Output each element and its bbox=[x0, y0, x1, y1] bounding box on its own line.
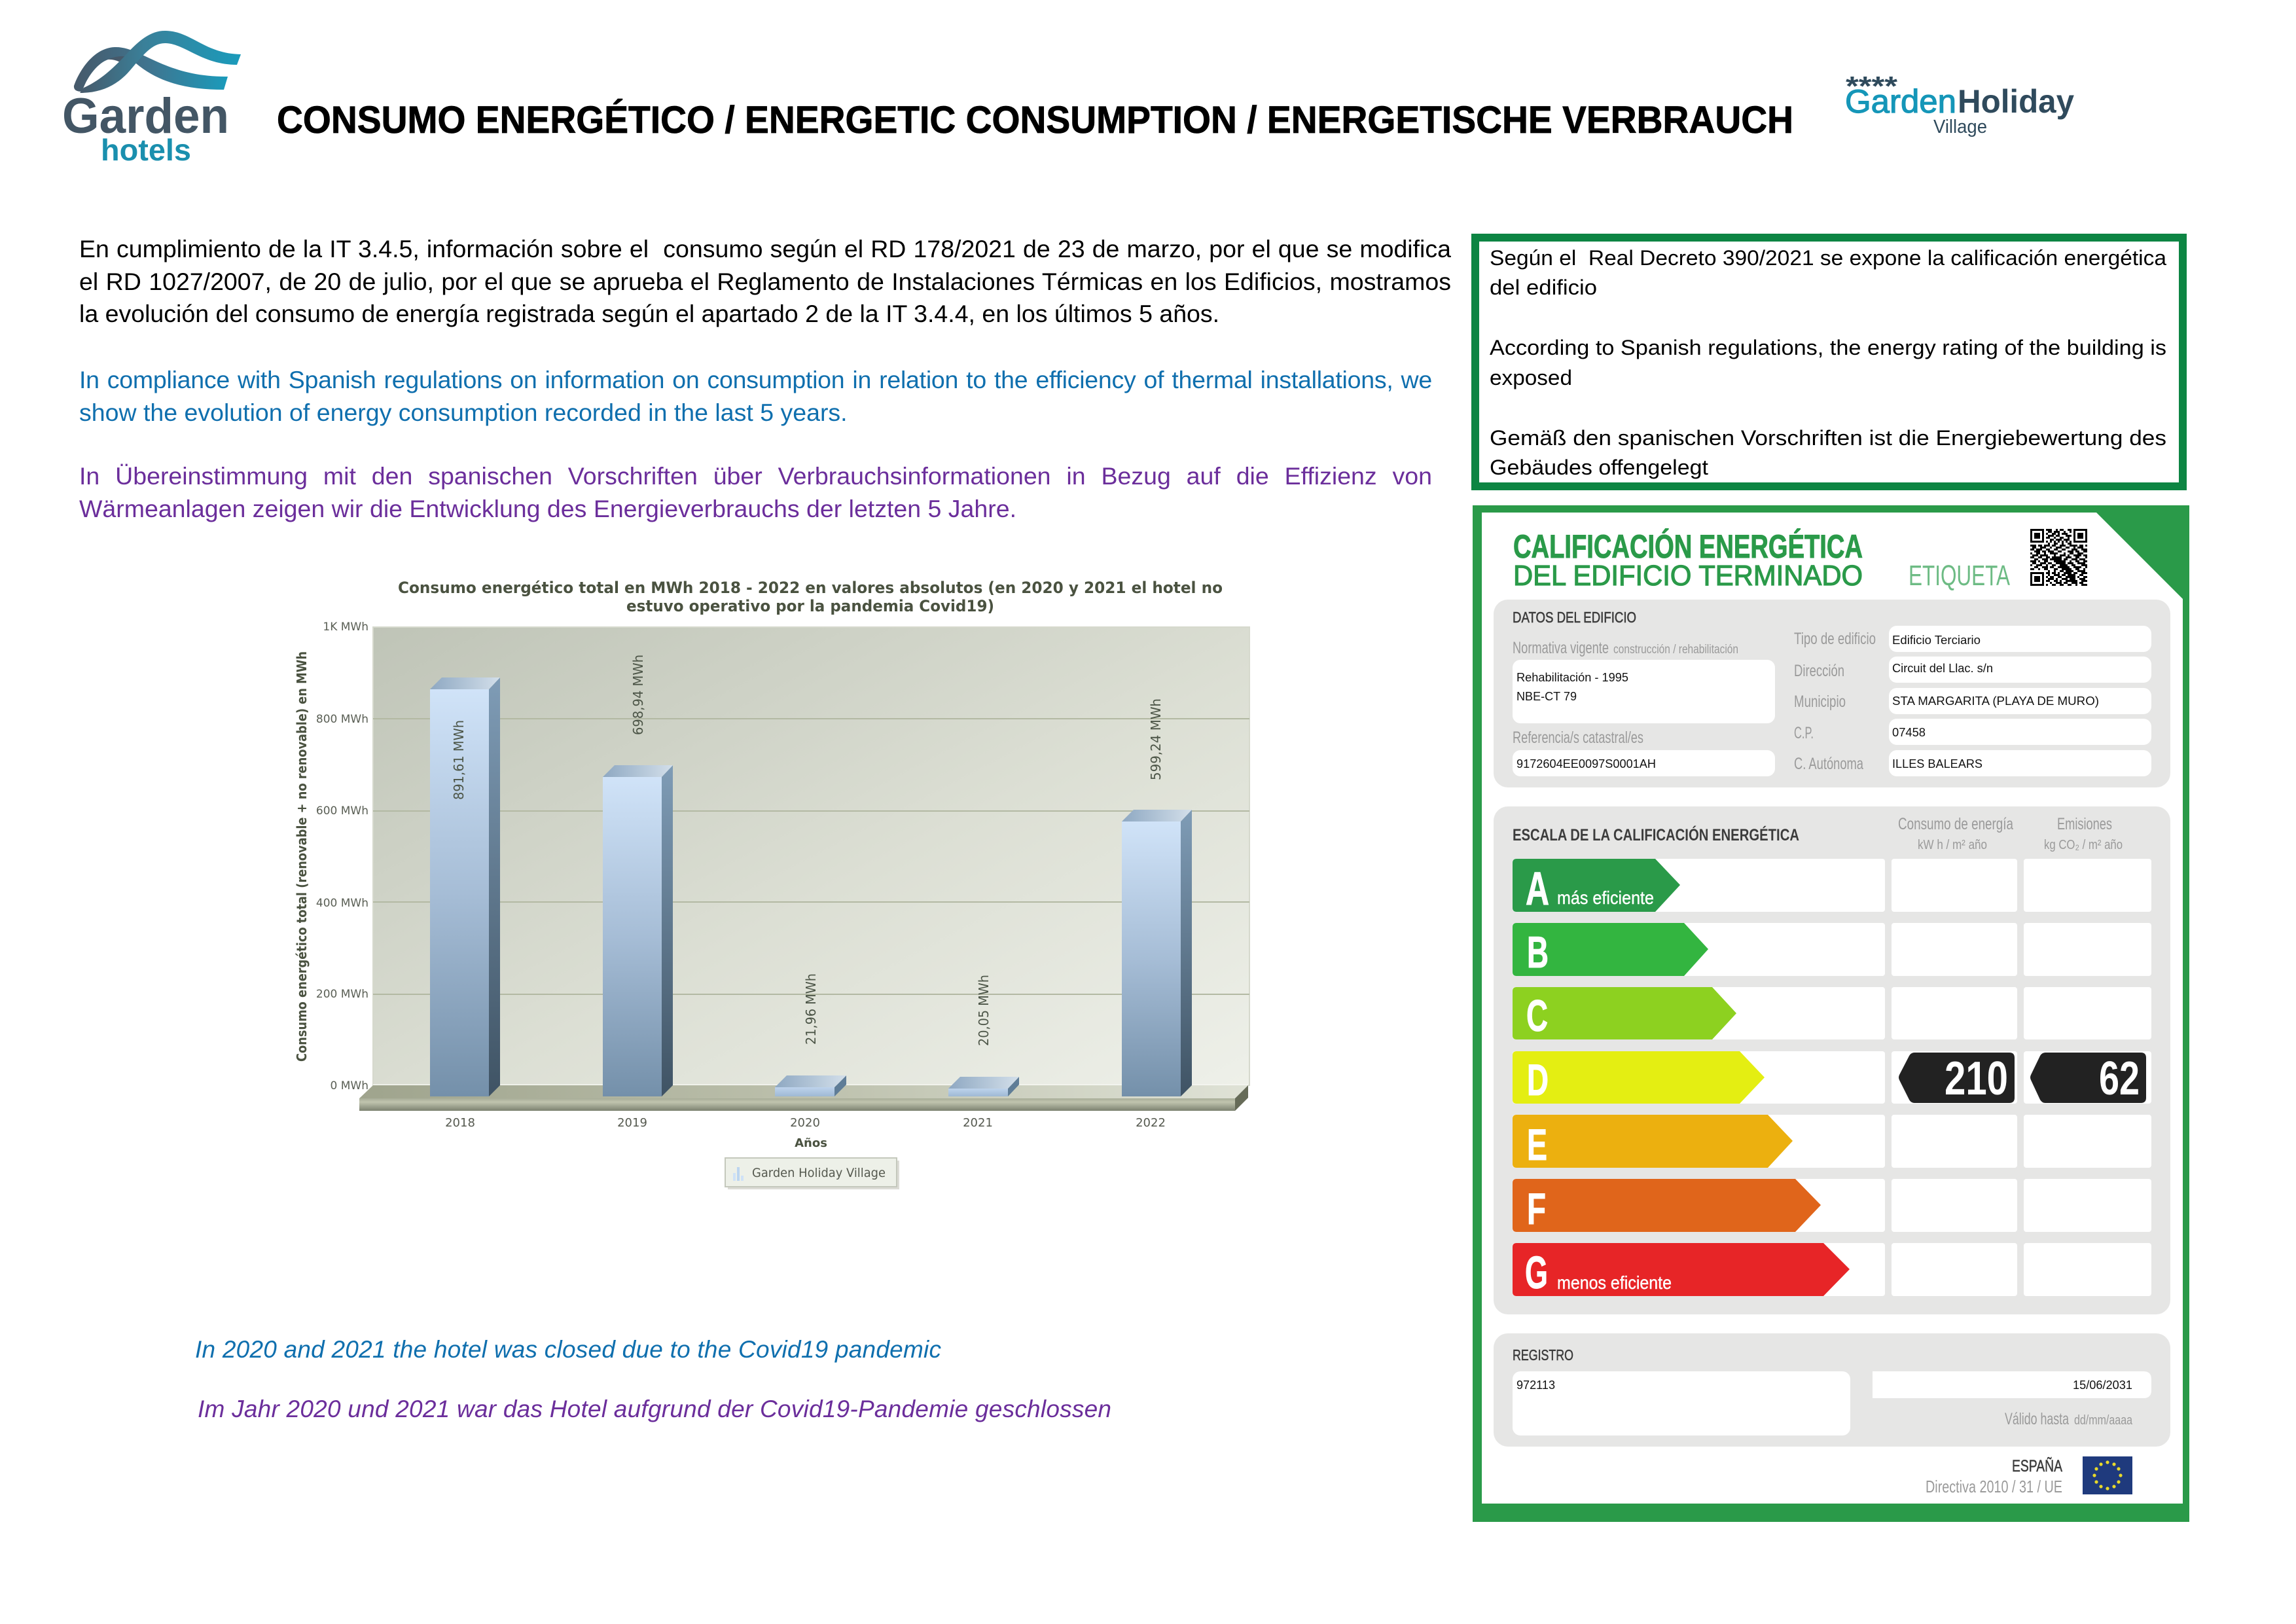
text block: Spanish introduction: En cumplimiento de la IT 3.4.5, información sobre el consumo según el RD 178/2021 de 23 de marzo, por el que se modifica bbox=[79, 235, 1451, 262]
column headers: Consumo de energía bbox=[1898, 815, 2013, 833]
arrow F bbox=[1513, 1179, 1821, 1234]
x-axis labels: 2019 bbox=[617, 1116, 647, 1130]
field values: Rehabilitación - 1995 bbox=[1516, 671, 1628, 684]
footer: country and directive bbox=[1926, 1456, 2062, 1496]
y-axis title: Consumo energético total (renovable + no renovable) en MWh bbox=[294, 651, 310, 1062]
label frame bbox=[1473, 505, 2189, 1522]
white row cells bbox=[1513, 859, 2151, 1296]
icon: QR code bbox=[2030, 529, 2087, 586]
x-axis labels bbox=[445, 1116, 1166, 1130]
text block: Spanish introduction: el RD 1027/2007, de 20 de julio, por el que se aprueba el Reglamento de Instalaciones Térmicas en los Edificios, mostramos bbox=[79, 267, 1451, 295]
chart title: Consumo energético total en MWh 2018 - 2022 en valores absolutos (en 2020 y 2021 el hotel no bbox=[398, 579, 1223, 597]
validity caption: Válido hasta bbox=[2005, 1410, 2069, 1428]
footer: country and directive: Directiva 2010 / 31 / UE bbox=[1926, 1477, 2062, 1496]
arrow E bbox=[1513, 1115, 1793, 1170]
emissions value pointer: 62 bbox=[2099, 1053, 2140, 1105]
chart legend bbox=[725, 1158, 899, 1189]
logo: Garden Holiday Village: Village bbox=[1933, 117, 1987, 137]
logo: Garden Holiday Village bbox=[1845, 71, 2074, 137]
field labels: C. Autónoma bbox=[1794, 755, 1863, 773]
chart title bbox=[398, 579, 1223, 615]
note text: According to Spanish regulations, the energy rating of the building is bbox=[1490, 336, 2166, 359]
arrow C: C bbox=[1526, 991, 1548, 1041]
text block: Spanish introduction bbox=[79, 235, 1451, 327]
arrow B: B bbox=[1527, 928, 1549, 977]
field values: 9172604EE0097S0001AH bbox=[1516, 757, 1656, 770]
x-axis labels: 2018 bbox=[445, 1116, 475, 1130]
field labels: Dirección bbox=[1794, 662, 1844, 680]
footer: country and directive: ESPAÑA bbox=[2012, 1456, 2062, 1475]
label heading: DEL EDIFICIO TERMINADO bbox=[1513, 560, 1863, 592]
label heading: ETIQUETA bbox=[1909, 560, 2010, 592]
bar 2018 bbox=[430, 677, 500, 1096]
x-axis labels: 2020 bbox=[790, 1116, 820, 1130]
field boxes bbox=[1513, 626, 2151, 776]
energy consumption value pointer: 210 bbox=[1945, 1053, 2008, 1105]
arrow F: F bbox=[1527, 1184, 1546, 1234]
energy consumption value pointer bbox=[1899, 1053, 2015, 1105]
arrow G bbox=[1513, 1243, 1850, 1298]
bar value labels: 599,24 MWh bbox=[1148, 698, 1164, 780]
covid note German: Im Jahr 2020 und 2021 war das Hotel aufgrund der Covid19-Pandemie geschlossen bbox=[198, 1396, 1111, 1422]
arrow A bbox=[1513, 859, 1680, 915]
arrow G: G bbox=[1525, 1247, 1548, 1298]
validity caption: dd/mm/aaaa bbox=[2074, 1413, 2133, 1428]
plot background bbox=[373, 627, 1249, 1085]
arrow D bbox=[1513, 1051, 1765, 1105]
panel: building data bbox=[1494, 600, 2170, 787]
y-axis tick labels: 600 MWh bbox=[316, 804, 368, 818]
logo: Garden Holiday Village: Holiday bbox=[1958, 83, 2074, 120]
panel: rating scale bbox=[1494, 806, 2170, 1314]
field values: NBE-CT 79 bbox=[1516, 690, 1577, 703]
column headers: kW h / m² año bbox=[1918, 838, 1987, 852]
bar 2020 bbox=[775, 1075, 846, 1096]
text block: English introduction bbox=[79, 366, 1432, 425]
icon: EU flag bbox=[2083, 1456, 2132, 1494]
x-axis title: Años bbox=[795, 1136, 827, 1150]
chart legend: Garden Holiday Village bbox=[752, 1166, 886, 1180]
y-axis tick labels: 1K MWh bbox=[323, 621, 368, 634]
panel: regulation note bbox=[1475, 238, 2183, 486]
label heading: CALIFICACIÓN ENERGÉTICA bbox=[1513, 528, 1863, 565]
note text: exposed bbox=[1490, 366, 1572, 389]
validity date box bbox=[1873, 1371, 2151, 1398]
note text: Gebäudes offengelegt bbox=[1490, 456, 1708, 479]
label heading bbox=[1513, 528, 2010, 592]
arrow C bbox=[1513, 987, 1736, 1041]
section heading: ESCALA DE LA CALIFICACIÓN ENERGÉTICA bbox=[1513, 825, 1799, 844]
text block: Spanish introduction: la evolución del consumo de energía registrada según el apartado 2 de la IT 3.4.4, en los últimos 5 años. bbox=[79, 300, 1219, 327]
y-axis tick labels: 400 MWh bbox=[316, 897, 368, 910]
logo: Garden hotels: Garden bbox=[62, 88, 229, 144]
bar 2019 bbox=[603, 765, 673, 1096]
panel: registry bbox=[1494, 1333, 2170, 1447]
note text bbox=[1490, 246, 2166, 479]
bar chart: energy consumption 2018-2022 bbox=[294, 579, 1249, 1189]
validity date box: 15/06/2031 bbox=[2073, 1379, 2132, 1392]
text block: German introduction bbox=[79, 462, 1432, 522]
title: CONSUMO ENERGÉTICO / ENERGETIC CONSUMPTION / ENERGETISCHE VERBRAUCH bbox=[277, 99, 1793, 141]
chart title: estuvo operativo por la pandemia Covid19) bbox=[626, 597, 994, 615]
column headers: Emisiones bbox=[2057, 815, 2112, 833]
arrow A: más eficiente bbox=[1557, 888, 1654, 908]
column headers bbox=[1898, 815, 2123, 852]
bar 2021 bbox=[948, 1077, 1019, 1096]
field labels: construcción / rehabilitación bbox=[1613, 643, 1738, 657]
emissions value pointer bbox=[2030, 1053, 2146, 1105]
column headers: kg CO₂ / m² año bbox=[2044, 838, 2123, 852]
arrow E: E bbox=[1527, 1120, 1547, 1170]
arrow D: D bbox=[1527, 1055, 1549, 1105]
registry heading: REGISTRO bbox=[1513, 1346, 1573, 1363]
field labels: Normativa vigente bbox=[1513, 639, 1609, 657]
text block: English introduction: In compliance with Spanish regulations on information on consumption in relation to the efficiency of thermal installations, we bbox=[79, 366, 1432, 393]
note text: Según el Real Decreto 390/2021 se expone la calificación energética bbox=[1490, 246, 2166, 270]
y-axis tick labels: 800 MWh bbox=[316, 713, 368, 726]
logo: Garden Holiday Village: Garden bbox=[1845, 83, 1956, 120]
field values: Edificio Terciario bbox=[1892, 634, 1981, 647]
arrow A: A bbox=[1526, 863, 1549, 915]
bar value labels bbox=[451, 655, 1164, 1046]
field labels: C.P. bbox=[1794, 724, 1814, 742]
y-axis tick labels: 200 MWh bbox=[316, 988, 368, 1001]
bar 2022 bbox=[1122, 810, 1192, 1096]
x-axis labels: 2021 bbox=[963, 1116, 993, 1130]
arrow G: menos eficiente bbox=[1557, 1272, 1672, 1293]
arrow B bbox=[1513, 923, 1708, 977]
field values: STA MARGARITA (PLAYA DE MURO) bbox=[1892, 695, 2099, 708]
logo: Garden Holiday Village: **** bbox=[1846, 71, 1898, 101]
section heading: DATOS DEL EDIFICIO bbox=[1513, 609, 1636, 626]
field labels: Tipo de edificio bbox=[1794, 630, 1876, 648]
note text: Gemäß den spanischen Vorschriften ist die Energiebewertung des bbox=[1490, 426, 2166, 450]
bar value labels: 891,61 MWh bbox=[451, 720, 467, 800]
bar value labels: 21,96 MWh bbox=[803, 973, 819, 1045]
chart floor bbox=[359, 1085, 1248, 1111]
bar value labels: 20,05 MWh bbox=[976, 975, 992, 1046]
registry number box: 972113 bbox=[1516, 1379, 1555, 1392]
field values: 07458 bbox=[1892, 726, 1926, 739]
text block: German introduction: Wärmeanlagen zeigen wir die Entwicklung des Energieverbrauchs der letzten 5 Jahre. bbox=[79, 495, 1016, 522]
y-axis tick labels: 0 MWh bbox=[331, 1079, 368, 1092]
field labels: Municipio bbox=[1794, 693, 1846, 711]
x-axis labels: 2022 bbox=[1136, 1116, 1166, 1130]
field labels bbox=[1513, 630, 1876, 773]
registry number box bbox=[1513, 1371, 1850, 1435]
covid note English: In 2020 and 2021 the hotel was closed due to the Covid19 pandemic bbox=[195, 1336, 941, 1363]
logo: Garden hotels: hotels bbox=[101, 133, 191, 167]
field values bbox=[1516, 634, 2099, 770]
text block: English introduction: show the evolution of energy consumption recorded in the last 5 years. bbox=[79, 398, 848, 425]
y-axis tick labels bbox=[316, 621, 368, 1092]
note text: del edificio bbox=[1490, 276, 1597, 299]
field values: Circuit del Llac. s/n bbox=[1892, 662, 1993, 675]
bar value labels: 698,94 MWh bbox=[630, 655, 646, 735]
logo: Garden hotels bbox=[62, 31, 241, 167]
field values: ILLES BALEARS bbox=[1892, 757, 1982, 770]
text block: German introduction: In Übereinstimmung mit den spanischen Vorschriften über Verbrauchsinformationen in Bezug auf die Effizienz von bbox=[79, 462, 1432, 490]
field labels: Referencia/s catastral/es bbox=[1513, 729, 1643, 747]
panel: energy label bbox=[1473, 505, 2189, 1522]
